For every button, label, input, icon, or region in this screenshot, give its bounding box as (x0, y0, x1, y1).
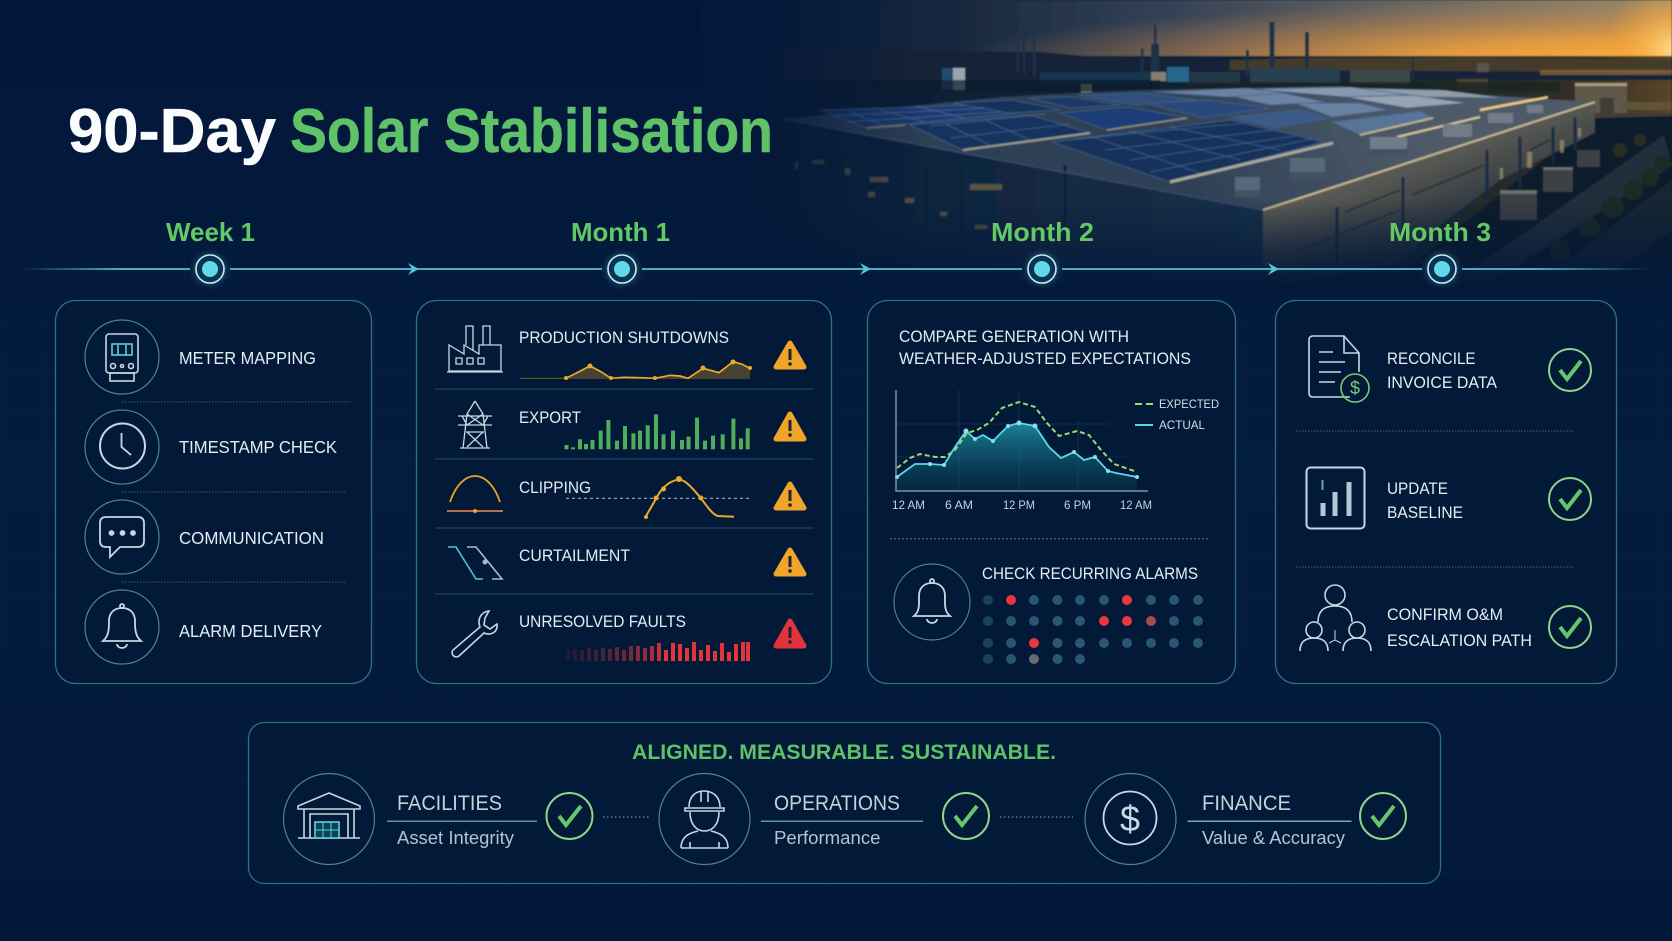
title: 90-Day (68, 97, 277, 166)
icon: bell (894, 564, 970, 640)
finance group: Value & Accuracy (1202, 828, 1345, 848)
labels (1387, 349, 1532, 650)
panel: month 3 (1276, 300, 1616, 684)
timeline node: month 1 (608, 255, 636, 283)
line chart: 6 AM (945, 498, 973, 512)
icon: amber warning 2 (776, 414, 804, 439)
timeline labels: Week 1 (166, 217, 255, 247)
alarm dot matrix (983, 595, 1203, 664)
chart: export bars (564, 414, 750, 449)
chart: clipping (566, 476, 750, 519)
chart heading: WEATHER-ADJUSTED EXPECTATIONS (899, 349, 1191, 368)
skyline chimneys and buildings (942, 17, 1489, 94)
hero photo: solar factory at sunset (700, 0, 1672, 300)
facilities group: Asset Integrity (397, 828, 514, 848)
timeline labels: Month 1 (571, 217, 670, 247)
labels: EXPORT (519, 408, 581, 427)
icon: clock (85, 410, 159, 484)
timeline node: month 3 (1428, 255, 1456, 283)
icon: chat bubble (85, 500, 159, 574)
arrow 3 (1268, 263, 1279, 275)
icon: check 3 (1549, 606, 1591, 648)
labels: UNRESOLVED FAULTS (519, 612, 686, 631)
chart legend: ACTUAL (1159, 418, 1205, 432)
panel: month 1 (416, 300, 832, 684)
icon: people (1300, 585, 1371, 651)
operations group: OPERATIONS (774, 792, 900, 815)
icon: amber warning 4 (776, 550, 804, 574)
timeline (20, 255, 1650, 283)
panel: month 2 (868, 300, 1236, 684)
line chart: 12 PM (1003, 498, 1035, 512)
labels: RECONCILE (1387, 349, 1476, 368)
icon: wrench (452, 611, 497, 657)
chart legend (1135, 397, 1219, 432)
finance group: FINANCE (1202, 792, 1291, 815)
operations group: Performance (774, 828, 880, 848)
timeline node: month 2 (1028, 255, 1056, 283)
labels: PRODUCTION SHUTDOWNS (519, 328, 729, 347)
finance group (1085, 774, 1406, 864)
chart heading: COMPARE GENERATION WITH (899, 327, 1129, 346)
labels: ESCALATION PATH (1387, 631, 1532, 650)
labels (179, 348, 337, 641)
icon: invoice (1309, 336, 1369, 402)
arrow 1 (408, 263, 419, 275)
chart legend: EXPECTED (1159, 397, 1219, 411)
finance group: $ (1120, 798, 1140, 839)
labels: INVOICE DATA (1387, 373, 1498, 392)
labels: CONFIRM O&M (1387, 605, 1503, 624)
summary heading: ALIGNED. MEASURABLE. SUSTAINABLE. (632, 741, 1056, 764)
labels (519, 328, 729, 631)
icon: red warning (776, 621, 804, 646)
facilities group (284, 774, 592, 864)
panel: alignment summary (248, 722, 1440, 884)
panel: week 1 (56, 300, 372, 684)
chart heading (899, 327, 1191, 368)
icon: check 2 (1549, 478, 1591, 520)
icon: bell (85, 590, 159, 664)
labels: COMMUNICATION (179, 528, 324, 548)
arrow 2 (860, 263, 871, 275)
labels: CURTAILMENT (519, 546, 630, 565)
title: Solar Stabilisation (290, 97, 773, 166)
icon: amber warning 3 (776, 484, 804, 508)
labels: BASELINE (1387, 503, 1463, 522)
labels: ALARM DELIVERY (179, 621, 322, 641)
chart: unresolved faults (566, 642, 750, 661)
labels: TIMESTAMP CHECK (179, 437, 337, 457)
timeline labels: Month 2 (991, 217, 1094, 247)
solar factory building (783, 86, 1600, 290)
facilities group: FACILITIES (397, 792, 502, 815)
line chart: 12 AM (892, 498, 925, 512)
heading: check recurring alarms: CHECK RECURRING ALARMS (982, 564, 1198, 583)
line chart (892, 390, 1152, 512)
timeline labels: Month 3 (1389, 217, 1491, 247)
icon: curtailment (448, 547, 502, 579)
icon: factory (447, 326, 503, 372)
labels: UPDATE (1387, 479, 1448, 498)
icon: bar chart (1306, 468, 1364, 528)
labels: CLIPPING (519, 478, 591, 497)
operations group (659, 774, 989, 864)
timeline node: week 1 (196, 255, 224, 283)
icon: pylon (458, 401, 492, 448)
icon: invoice: $ (1350, 378, 1360, 398)
icon: check 1 (1549, 349, 1591, 391)
icon: amber warning 1 (776, 343, 804, 367)
icon: meter (85, 320, 159, 394)
chart: production shutdowns (520, 360, 752, 380)
streets and trees (1380, 116, 1672, 290)
title (68, 97, 773, 166)
line chart: 6 PM (1064, 498, 1091, 512)
labels: METER MAPPING (179, 348, 316, 368)
line chart: 12 AM (1120, 498, 1152, 512)
timeline labels (166, 217, 1491, 247)
icon: clipping curve (447, 476, 503, 513)
